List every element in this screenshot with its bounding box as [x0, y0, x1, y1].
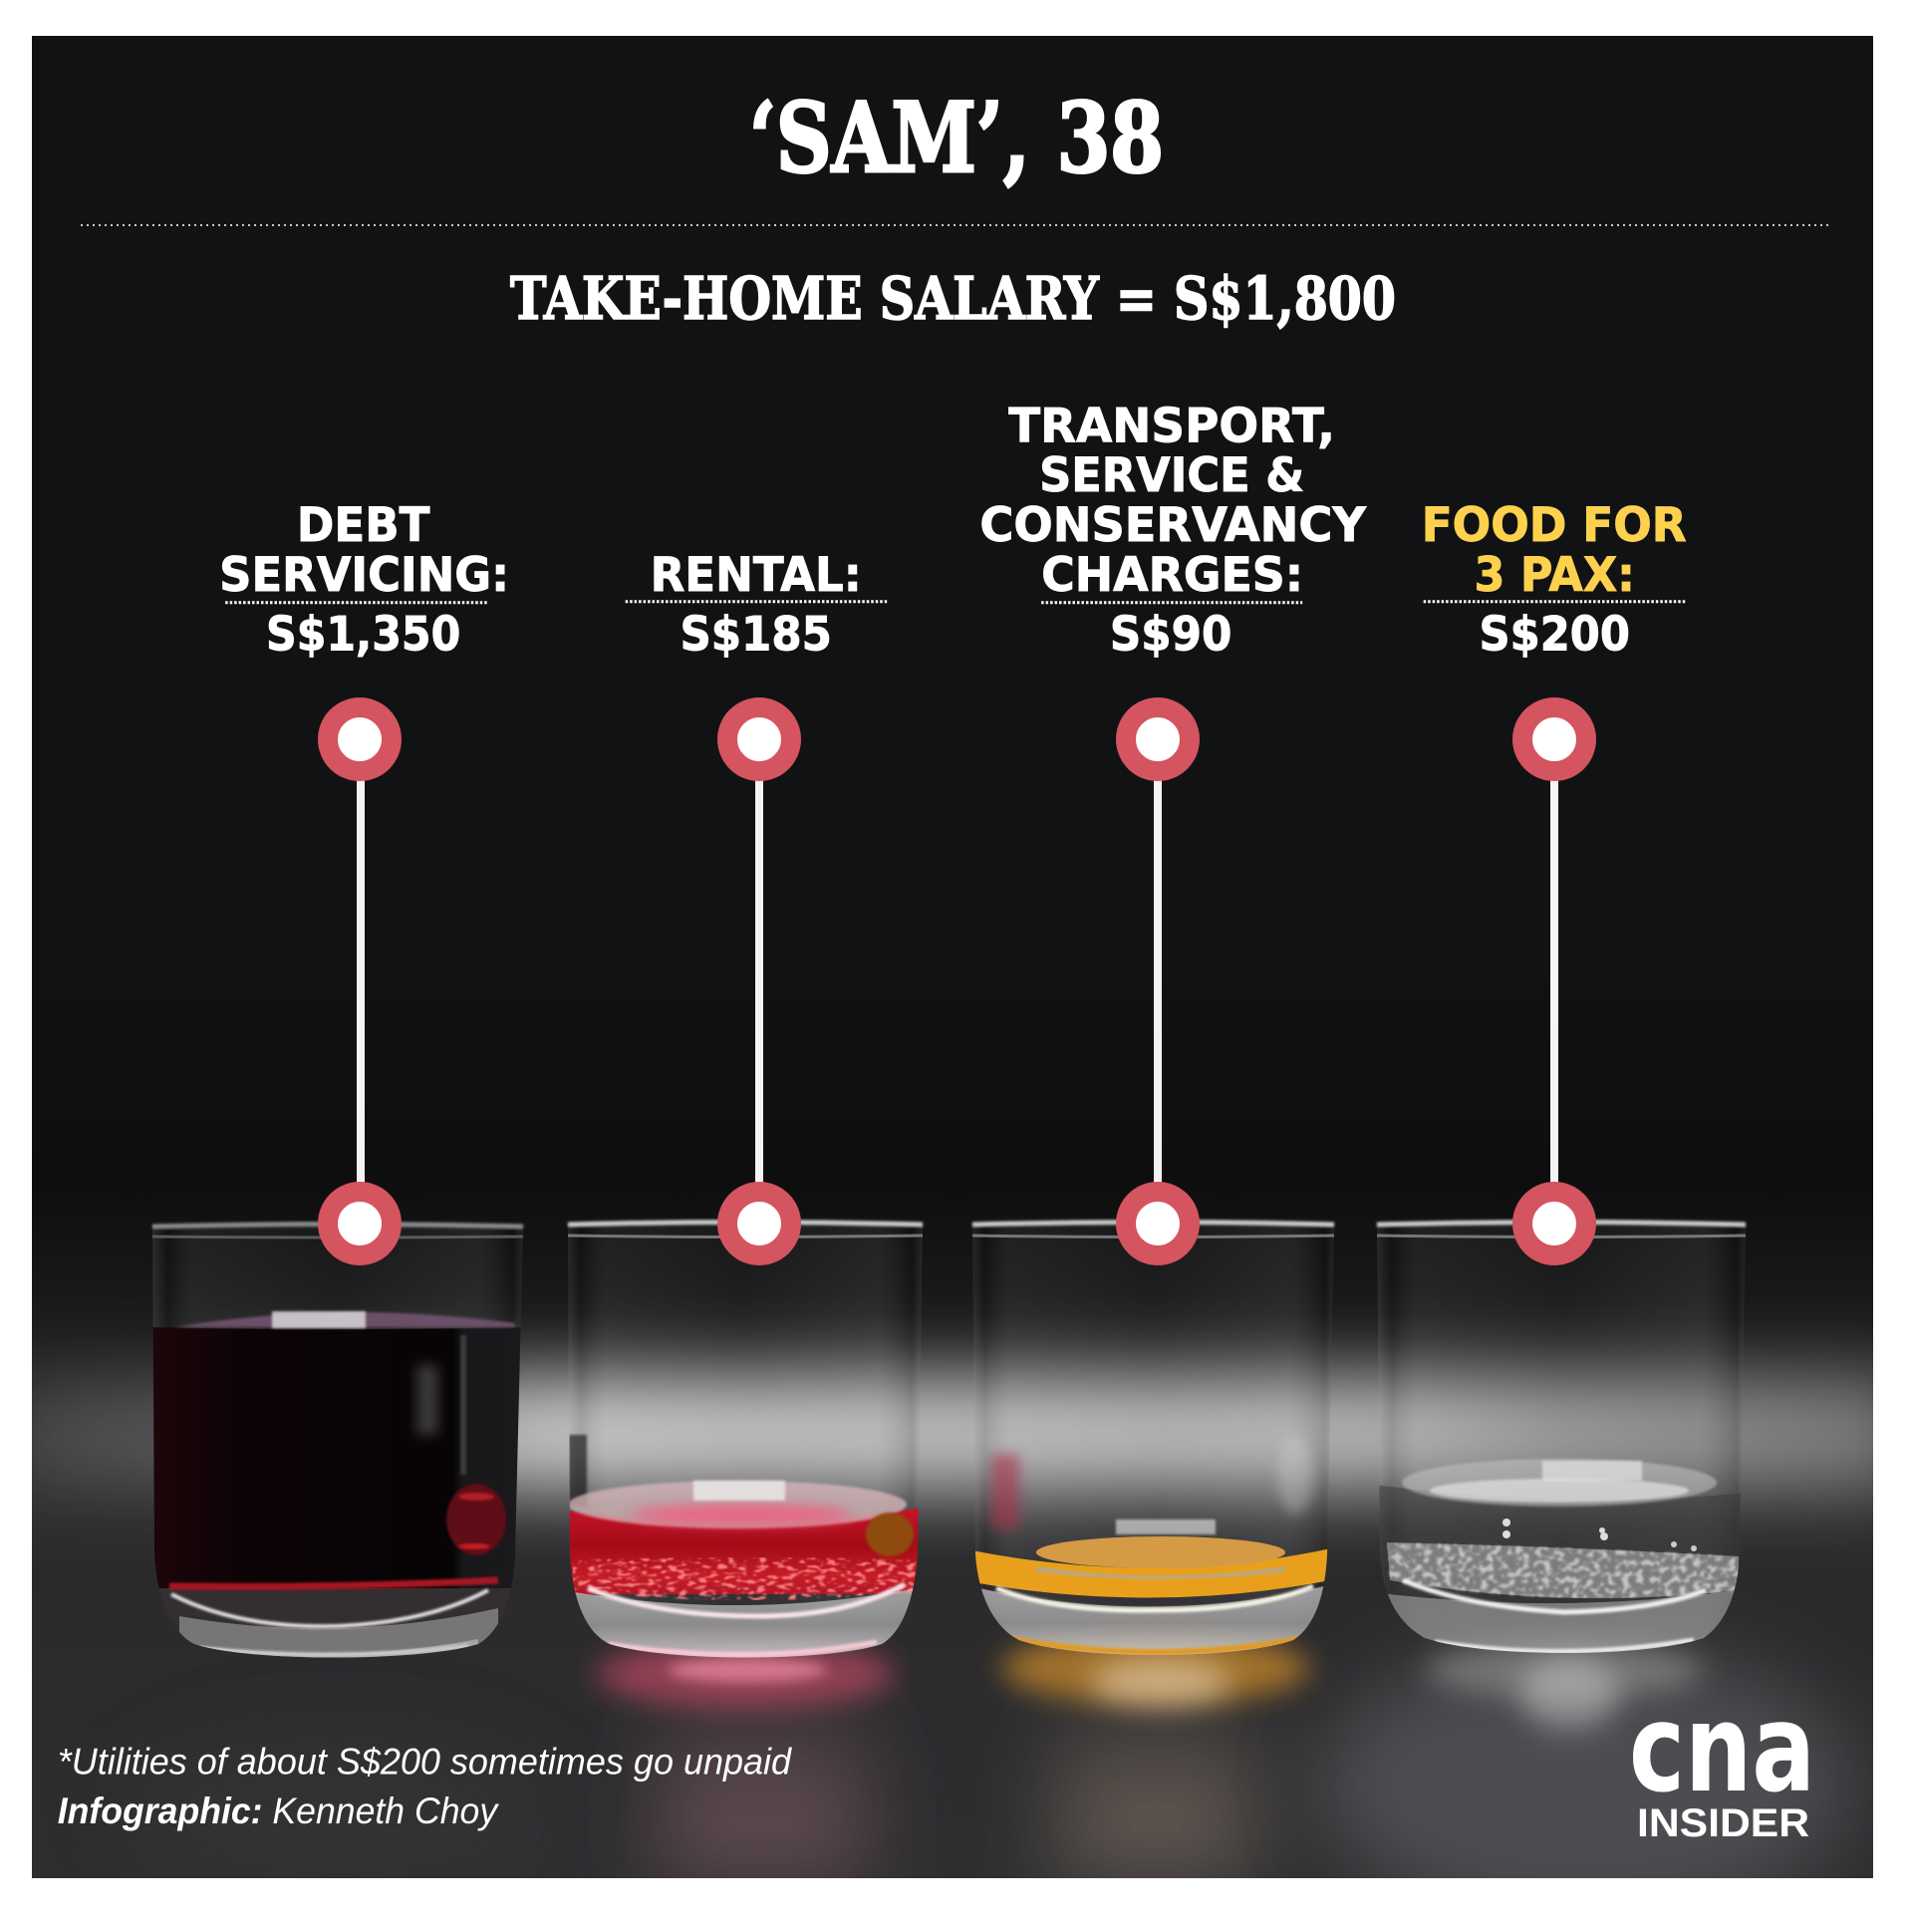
label: rental: RENTAL:: [651, 549, 862, 603]
footnote and credit: Infographic: Kenneth Choy: [58, 1791, 500, 1831]
title: ‘SAM’, 38: [749, 82, 1164, 194]
label: food for 3 pax: S$200: [1479, 609, 1630, 663]
glass 2: rental, red liquid: [563, 1221, 927, 1664]
footnote and credit: [58, 1741, 793, 1831]
pointer: transport: [1126, 707, 1190, 1255]
footnote and credit: *Utilities of about S$200 sometimes go unpaid: [58, 1741, 793, 1782]
pointer: debt servicing: [328, 707, 392, 1255]
label: debt servicing: DEBT: [297, 499, 429, 553]
label: food for 3 pax: [1422, 499, 1687, 663]
label: transport, service and conservancy charges: CHARGES:: [1041, 549, 1303, 603]
heading: take-home salary: TAKE-HOME SALARY = S$1,800: [510, 264, 1396, 333]
glass 4: food, clear water with bubbles: [1373, 1221, 1752, 1664]
label: transport, service and conservancy charges: TRANSPORT,: [1008, 400, 1335, 453]
label: rental: [626, 549, 888, 663]
logo: cna insider: INSIDER: [1637, 1801, 1809, 1845]
glass 3: transport and charges, orange liquid: [961, 1221, 1340, 1664]
logo: cna insider: [1629, 1678, 1815, 1845]
label: transport, service and conservancy charges: [979, 400, 1367, 663]
logo: cna insider: cna: [1629, 1678, 1815, 1819]
glass 1: debt servicing, dark liquid: [149, 1221, 528, 1664]
label: debt servicing: SERVICING:: [219, 549, 509, 603]
label: transport, service and conservancy charges: SERVICE &: [1039, 449, 1304, 503]
pointer: food: [1522, 707, 1586, 1255]
label: food for 3 pax: 3 PAX:: [1475, 549, 1635, 603]
pointer: rental: [727, 707, 791, 1255]
label: transport, service and conservancy charges: S$90: [1110, 609, 1231, 663]
label: debt servicing: S$1,350: [266, 609, 460, 663]
label: rental: S$185: [680, 609, 832, 663]
label: food for 3 pax: FOOD FOR: [1422, 499, 1687, 553]
label: debt servicing: [219, 499, 509, 663]
label: transport, service and conservancy charges: CONSERVANCY: [979, 499, 1367, 553]
